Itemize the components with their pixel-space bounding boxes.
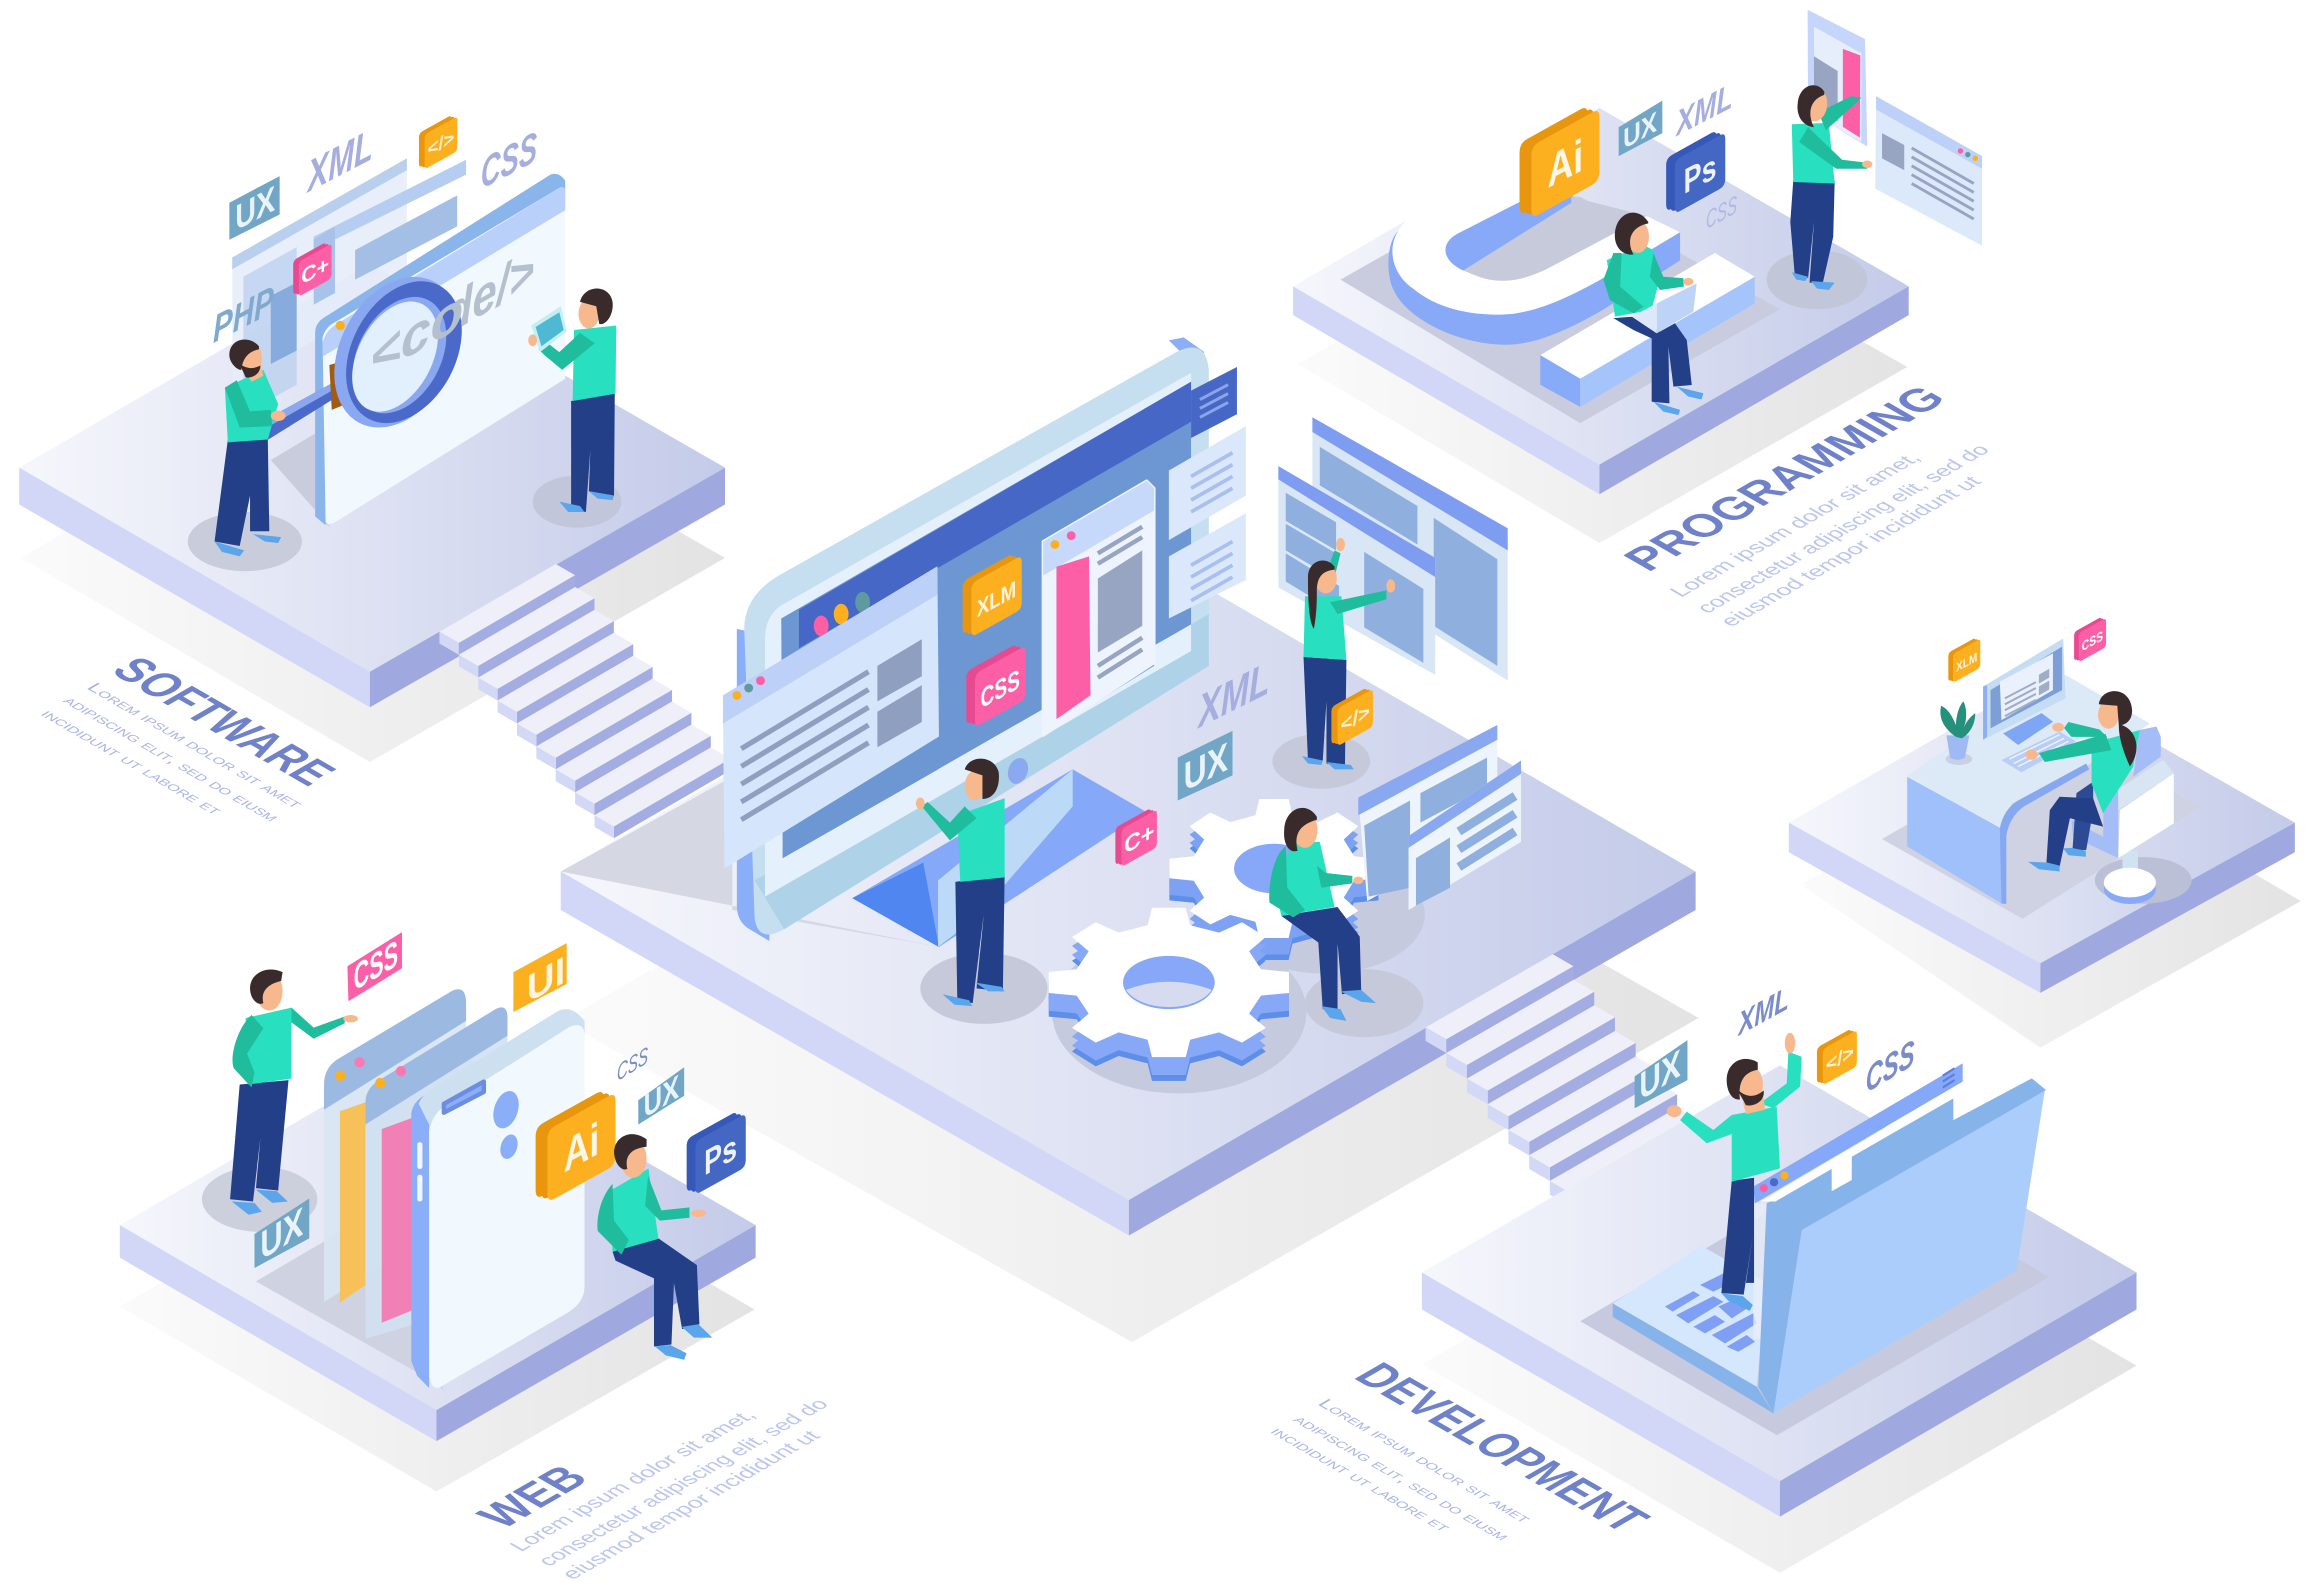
floating window (1875, 96, 1982, 246)
text block: web description: eiusmod tempor incididunt ut (556, 1427, 826, 1583)
badge: C+ (293, 243, 332, 295)
text block: programming description: Lorem ipsum dolor sit amet, (1664, 449, 1926, 600)
badge: XLM: XLM (977, 576, 1016, 623)
text block: software description (36, 680, 309, 824)
panel: web (120, 932, 834, 1583)
platform: desk (1789, 678, 2295, 993)
panel: programming (1293, 10, 1995, 630)
tag: UX: UX (1184, 734, 1228, 800)
gears (1049, 799, 1425, 1093)
badge: Ai (536, 1092, 616, 1200)
text block: development description: adipiscing elit, sed do eiusm (1289, 1412, 1515, 1543)
person: man sitting (597, 1134, 712, 1360)
text block: software description: incididunt ut labore et (36, 707, 229, 818)
stairs: software to central (439, 564, 730, 838)
badge: code (419, 116, 457, 168)
floating windows by gears (1358, 725, 1521, 910)
window: pink bar (1043, 481, 1154, 735)
person: man at monitor (916, 759, 1048, 1024)
laptop (1613, 1063, 2046, 1413)
text block: software description: Lorem ipsum dolor sit amet (82, 680, 309, 811)
platform: central (561, 543, 1696, 1235)
label: XML: XML (1737, 979, 1789, 1044)
badge: Ai: Ai (564, 1112, 599, 1183)
platform: software (19, 263, 725, 707)
monitor shadow on floor (561, 777, 940, 947)
platform: web (120, 1040, 756, 1441)
label: XML: XML (1196, 652, 1269, 739)
label: CSS: CSS (1866, 1031, 1915, 1102)
monitor (737, 337, 1237, 947)
badge: Ps (1666, 132, 1725, 212)
text block: web description: Lorem ipsum dolor sit amet, (504, 1406, 761, 1555)
person: woman standing (1790, 85, 1872, 290)
badge: Ps (687, 1113, 746, 1193)
person: bearded man holding magnifier (215, 340, 286, 556)
badge: code (1331, 689, 1373, 745)
badge: C+: C+ (1124, 818, 1154, 860)
platform: development (1422, 1065, 2137, 1517)
label: PHP: PHP (213, 277, 274, 352)
phone (411, 1009, 584, 1388)
person: woman at computer (2026, 691, 2140, 871)
text block: web description: consectetur adipiscing elit, sed do (532, 1395, 834, 1569)
badge: Ps: Ps (1684, 145, 1717, 202)
plant (1940, 701, 1975, 765)
tag: UX: UX (1623, 106, 1657, 156)
text block: software description: adipiscing elit, sed do eiusm (59, 693, 285, 824)
floating phone window (1808, 10, 1867, 146)
label: CSS: CSS (1706, 190, 1737, 235)
person: man with raised arm (1667, 1033, 1802, 1311)
text block: programming description: consectetur adipiscing elit, sed do (1691, 441, 1995, 617)
badge: CSS (2074, 618, 2106, 661)
text block: development description (1266, 1396, 1538, 1543)
person: woman sitting with laptop (1603, 213, 1703, 415)
heading: WEB: WEB (467, 1459, 600, 1535)
text block: development description: Lorem ipsum dolor sit amet (1313, 1396, 1538, 1526)
window: text content (723, 566, 939, 869)
person: woman touching windows (1272, 538, 1395, 789)
badge: code: </> (1341, 699, 1370, 737)
badge: XLM (1948, 639, 1980, 682)
badge: XLM: XLM (1956, 649, 1977, 675)
tag: UX: UX (235, 179, 275, 239)
platform: programming (1293, 108, 1909, 494)
tag: CSS: CSS (354, 932, 398, 1000)
badge: XLM (963, 555, 1022, 635)
person: man holding tablet (528, 289, 616, 512)
heading: DEVELOPMENT: DEVELOPMENT (1343, 1356, 1660, 1539)
heading: PROGRAMMING: PROGRAMMING (1612, 379, 1957, 578)
icon: magnifying glass: <co (370, 278, 463, 391)
panel: development (1266, 979, 2137, 1543)
badge: Ps: Ps (704, 1126, 737, 1183)
transparent code windows (232, 158, 466, 414)
panel: software (19, 116, 725, 824)
label: XML: XML (306, 119, 373, 204)
tag: UI: UI (527, 948, 565, 1012)
label: CSS: CSS (617, 1042, 648, 1087)
label: CSS: CSS (481, 122, 537, 199)
bench (1540, 253, 1755, 407)
badge: Ai: Ai (1548, 129, 1583, 199)
desk (1907, 673, 2150, 904)
icon: magnifying glass (246, 255, 485, 449)
badge: CSS: CSS (981, 663, 1020, 715)
person: man pointing (230, 969, 358, 1215)
stairs: central to development (1426, 954, 1698, 1207)
chair (2071, 726, 2174, 904)
text block: programming description: eiusmod tempor incididunt ut (1715, 473, 1987, 630)
panel: desk (1789, 618, 2295, 993)
tag: UX: UX (1639, 1040, 1681, 1109)
phone screens behind (324, 989, 508, 1339)
tag: CSS (347, 932, 402, 1001)
badge: CSS (966, 646, 1025, 725)
badge: Ai (1520, 108, 1599, 216)
person: woman sitting on gear (1269, 808, 1423, 1037)
badge: code: </> (1826, 1040, 1854, 1077)
heading: SOFTWARE: SOFTWARE (100, 650, 347, 793)
tag: UI (513, 943, 567, 1012)
badge: code: </> (428, 127, 454, 161)
panel: central scene (723, 337, 1521, 1093)
small floating windows (1169, 426, 1246, 618)
badge: C+: C+ (301, 251, 329, 289)
code screen: <code/> (370, 238, 534, 391)
panel: central platform (561, 543, 1696, 1235)
badge: CSS: CSS (2082, 629, 2103, 655)
floating browser windows (1278, 417, 1508, 681)
tag: UX: UX (260, 1199, 303, 1270)
text block: development description: incididunt ut labore et (1266, 1424, 1457, 1535)
magnet shaped seat (1388, 151, 1680, 345)
tag: UX: UX (644, 1067, 679, 1126)
badge: code (1817, 1030, 1857, 1084)
code screen (315, 174, 565, 525)
desktop computer (1983, 638, 2091, 772)
badge: C+ (1115, 809, 1157, 865)
label: XML: XML (1675, 76, 1733, 145)
